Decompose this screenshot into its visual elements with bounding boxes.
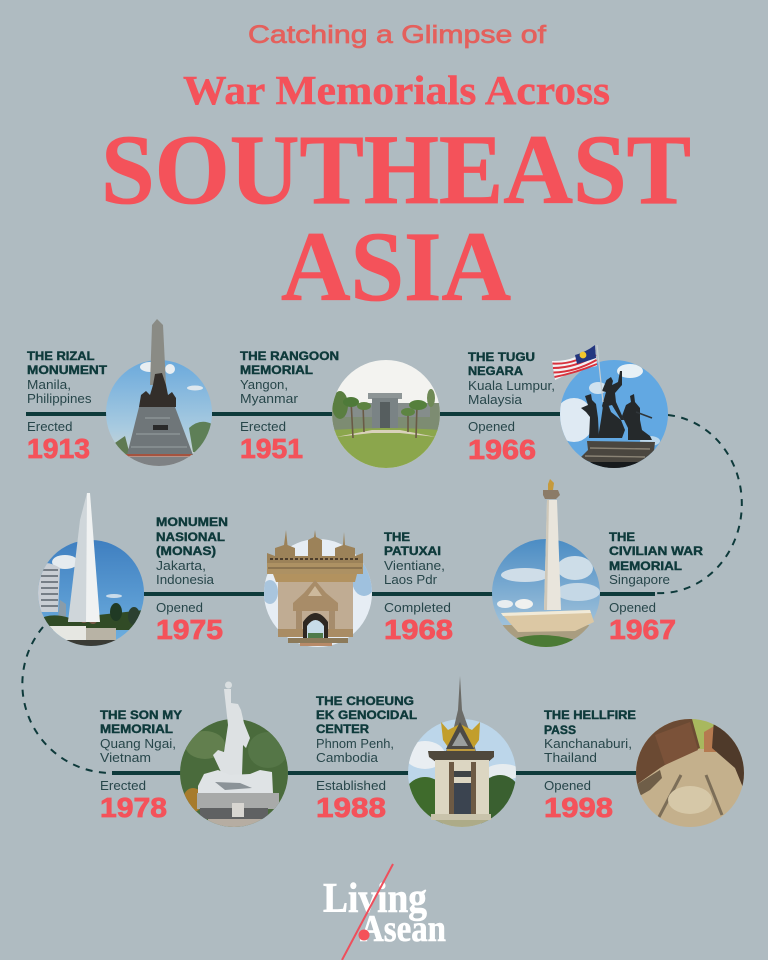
entry: Monumen Nasional: Opened	[156, 601, 203, 615]
entry: The Rizal Monument	[27, 351, 107, 464]
entry: The Son My Memorial: MEMORIAL	[100, 724, 173, 736]
entry: The Hellfire Pass: THE HELLFIRE	[544, 710, 636, 722]
title block	[101, 21, 691, 322]
entry: The Hellfire Pass: 1998	[544, 792, 613, 823]
entry: The Patuxai: Laos Pdr	[384, 573, 437, 587]
entry: The Choeung Ek Genocidal Center: CENTER	[316, 724, 370, 736]
logo: Living Asean	[323, 864, 446, 960]
entry: The Civilian War Memorial: THE	[609, 532, 635, 544]
entry: Monumen Nasional: Indonesia	[156, 573, 214, 587]
entry: The Rangoon Memorial: MEMORIAL	[240, 365, 313, 377]
figure: right soldier	[622, 394, 652, 440]
entry: The Choeung Ek Genocidal Center: THE CHOEUNG	[316, 696, 414, 708]
entry: The Choeung Ek Genocidal Center: Cambodia	[316, 751, 378, 765]
icon: obelisk photo	[38, 493, 144, 648]
entry: Monumen Nasional: Jakarta,	[156, 559, 206, 573]
entry: The Choeung Ek Genocidal Center: Phnom Penh,	[316, 737, 394, 751]
entry: The Hellfire Pass: Kanchanaburi,	[544, 737, 632, 751]
entry: The Son My Memorial: Vietnam	[100, 751, 151, 765]
icon: Patuxai photo	[262, 530, 376, 647]
entry: The Son My Memorial: THE SON MY	[100, 710, 182, 722]
entry: The Civilian War Memorial	[609, 532, 704, 645]
entry: The Tugu Negara: 1966	[468, 434, 536, 465]
entry: The Son My Memorial: 1978	[100, 792, 167, 823]
entry: The Hellfire Pass: Thailand	[544, 751, 597, 765]
heading: Southeast: SOUTHEAST	[101, 114, 691, 225]
entry: The Rangoon Memorial: Erected	[240, 420, 286, 434]
entry: The Patuxai: THE	[384, 532, 410, 544]
icon: Rangoon Memorial photo	[332, 360, 440, 470]
entry: The Rizal Monument: Manila,	[27, 378, 71, 392]
entry: The Patuxai: Vientiane,	[384, 559, 445, 573]
timeline lines	[26, 412, 655, 775]
icon: Tugu Negara photo	[552, 345, 668, 470]
icon: Son My Memorial photo	[180, 682, 288, 828]
entry: The Son My Memorial: Quang Ngai,	[100, 737, 176, 751]
entry: The Choeung Ek Genocidal Center: EK GENOCIDAL	[316, 710, 417, 722]
entry: The Patuxai: Completed	[384, 601, 451, 615]
entry: Monumen Nasional: 1975	[156, 614, 223, 645]
figure: middle soldier	[598, 404, 625, 438]
entry: The Rangoon Memorial: 1951	[240, 433, 303, 464]
entry: The Choeung Ek Genocidal Center	[316, 696, 417, 823]
entry: The Tugu Negara: Opened	[468, 420, 515, 434]
entry: The Tugu Negara	[468, 352, 555, 465]
entry: The Civilian War Memorial: 1967	[609, 614, 676, 645]
entry: The Choeung Ek Genocidal Center: Established	[316, 779, 386, 793]
entry: The Civilian War Memorial: Opened	[609, 601, 656, 615]
icon: Choeung Ek stupa photo	[408, 677, 516, 827]
entry: The Choeung Ek Genocidal Center: 1988	[316, 792, 386, 823]
heading: War Memorials Across: War Memorials Across	[183, 67, 610, 113]
subtitle: Catching a Glimpse of: Catching a Glimpse of	[248, 21, 546, 49]
entry: The Tugu Negara: Kuala Lumpur,	[468, 379, 555, 393]
entry: Monumen Nasional: NASIONAL	[156, 532, 225, 544]
icon: column memorial photo	[492, 479, 600, 652]
entry: The Civilian War Memorial: CIVILIAN WAR	[609, 546, 704, 558]
entry: Monumen Nasional: MONUMEN	[156, 517, 228, 529]
entry: The Hellfire Pass: Opened	[544, 779, 591, 793]
entry: Monumen Nasional	[156, 517, 228, 645]
entry: The Tugu Negara: THE TUGU	[468, 352, 535, 364]
entry: The Patuxai: PATUXAI	[384, 546, 441, 558]
dashed connector: row 1 to row 2	[655, 415, 742, 593]
entry: The Tugu Negara: Malaysia	[468, 393, 522, 407]
icon: Hellfire Pass photo	[636, 719, 744, 827]
entry: The Son My Memorial	[100, 710, 182, 823]
figure: top soldier	[602, 371, 624, 420]
icon: Malaysian flag	[552, 345, 597, 380]
entry: Monumen Nasional: (MONAS)	[156, 546, 216, 558]
figure: left soldier	[581, 394, 599, 438]
entry: The Rizal Monument: Erected	[27, 420, 73, 434]
heading: Asia: ASIA	[281, 211, 511, 322]
dashed connector: row 2 to row 3	[22, 627, 112, 773]
entry: The Rizal Monument: Philippines	[27, 392, 92, 406]
entry: The Hellfire Pass	[544, 710, 636, 823]
entry: The Civilian War Memorial: MEMORIAL	[609, 561, 682, 573]
entry: The Rizal Monument: 1913	[27, 433, 90, 464]
entry: The Rangoon Memorial	[240, 351, 339, 464]
entry: The Civilian War Memorial: Singapore	[609, 573, 670, 587]
entry: The Patuxai: 1968	[384, 614, 453, 645]
entry: The Rangoon Memorial: Myanmar	[240, 392, 298, 406]
logo: Living Asean: Asean	[360, 908, 446, 950]
entry: The Rangoon Memorial: THE RANGOON	[240, 351, 339, 363]
entry: The Rangoon Memorial: Yangon,	[240, 378, 288, 392]
entry: The Rizal Monument: THE RIZAL	[27, 351, 94, 363]
icon: Rizal Monument photo	[106, 319, 212, 467]
logo: Living Asean: Living	[323, 876, 427, 922]
entry: The Tugu Negara: NEGARA	[468, 366, 523, 378]
entry: The Rizal Monument: MONUMENT	[27, 365, 107, 377]
entry: The Hellfire Pass: PASS	[544, 725, 576, 737]
entry: The Patuxai	[384, 532, 453, 645]
entry: The Son My Memorial: Erected	[100, 779, 146, 793]
